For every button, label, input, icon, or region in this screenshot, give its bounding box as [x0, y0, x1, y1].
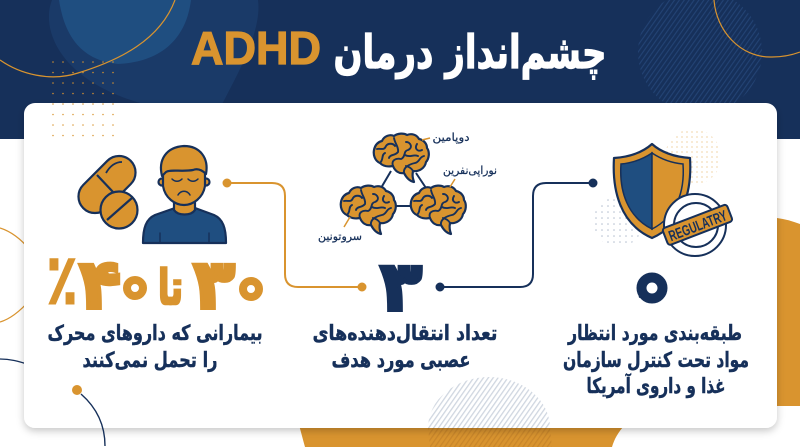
digit 4: ۴ [79, 246, 121, 325]
background: orange shapes [0, 218, 800, 447]
stat: 5 [639, 278, 662, 300]
caption: right [563, 321, 749, 398]
caption: middle: تعداد انتقال‌دهنده‌های [312, 321, 498, 345]
caption: middle [312, 321, 498, 372]
digit 0: ۰ [241, 290, 245, 299]
digit 0: ۰ [125, 289, 129, 298]
icon: pills [72, 149, 142, 228]
word: to: تا [158, 260, 183, 316]
label: dopamine: دوپامین [432, 131, 470, 144]
background: navy header [0, 0, 800, 139]
brain network [318, 131, 497, 243]
title: ADHD: ADHD [191, 22, 321, 74]
caption: right: غذا و داروی آمریکا [586, 373, 726, 398]
caption: left [48, 321, 262, 372]
panel: white card [24, 103, 777, 428]
brain: norepinephrine [411, 186, 466, 234]
icon: regulatory shield: REGULATRY [666, 207, 730, 245]
stat: 5: ۵ [639, 291, 644, 300]
hatch circle inside card [428, 377, 550, 428]
digit 0 [125, 280, 143, 298]
stat: 3: ۳ [380, 248, 422, 327]
digit 0 [241, 281, 259, 299]
dot grid [52, 61, 116, 145]
decoration: bottom-left dot and curve [72, 385, 105, 446]
title: Persian part: چشم‌انداز درمان [334, 25, 606, 80]
caption: left: بیمارانی که داروهای محرک [48, 321, 262, 345]
brain: serotonin [341, 186, 396, 234]
label: norepinephrine: نوراپی‌نفرین [443, 164, 497, 177]
icon: regulatory shield [593, 129, 733, 256]
stat: 30 to 40 percent [47, 241, 259, 325]
caption: right: طبقه‌بندی مورد انتظار [567, 321, 742, 345]
label: serotonin: سروتونین [318, 230, 362, 243]
percent sign: ٪ [47, 241, 77, 320]
digit 3: ۳ [193, 246, 235, 325]
caption: left: را تحمل نمی‌کنند [82, 348, 218, 372]
brain: dopamine [374, 134, 429, 182]
icon: sad person [143, 146, 226, 243]
caption: middle: عصبی مورد هدف [332, 348, 470, 372]
connector: navy [436, 180, 596, 290]
connector: orange [224, 180, 366, 290]
